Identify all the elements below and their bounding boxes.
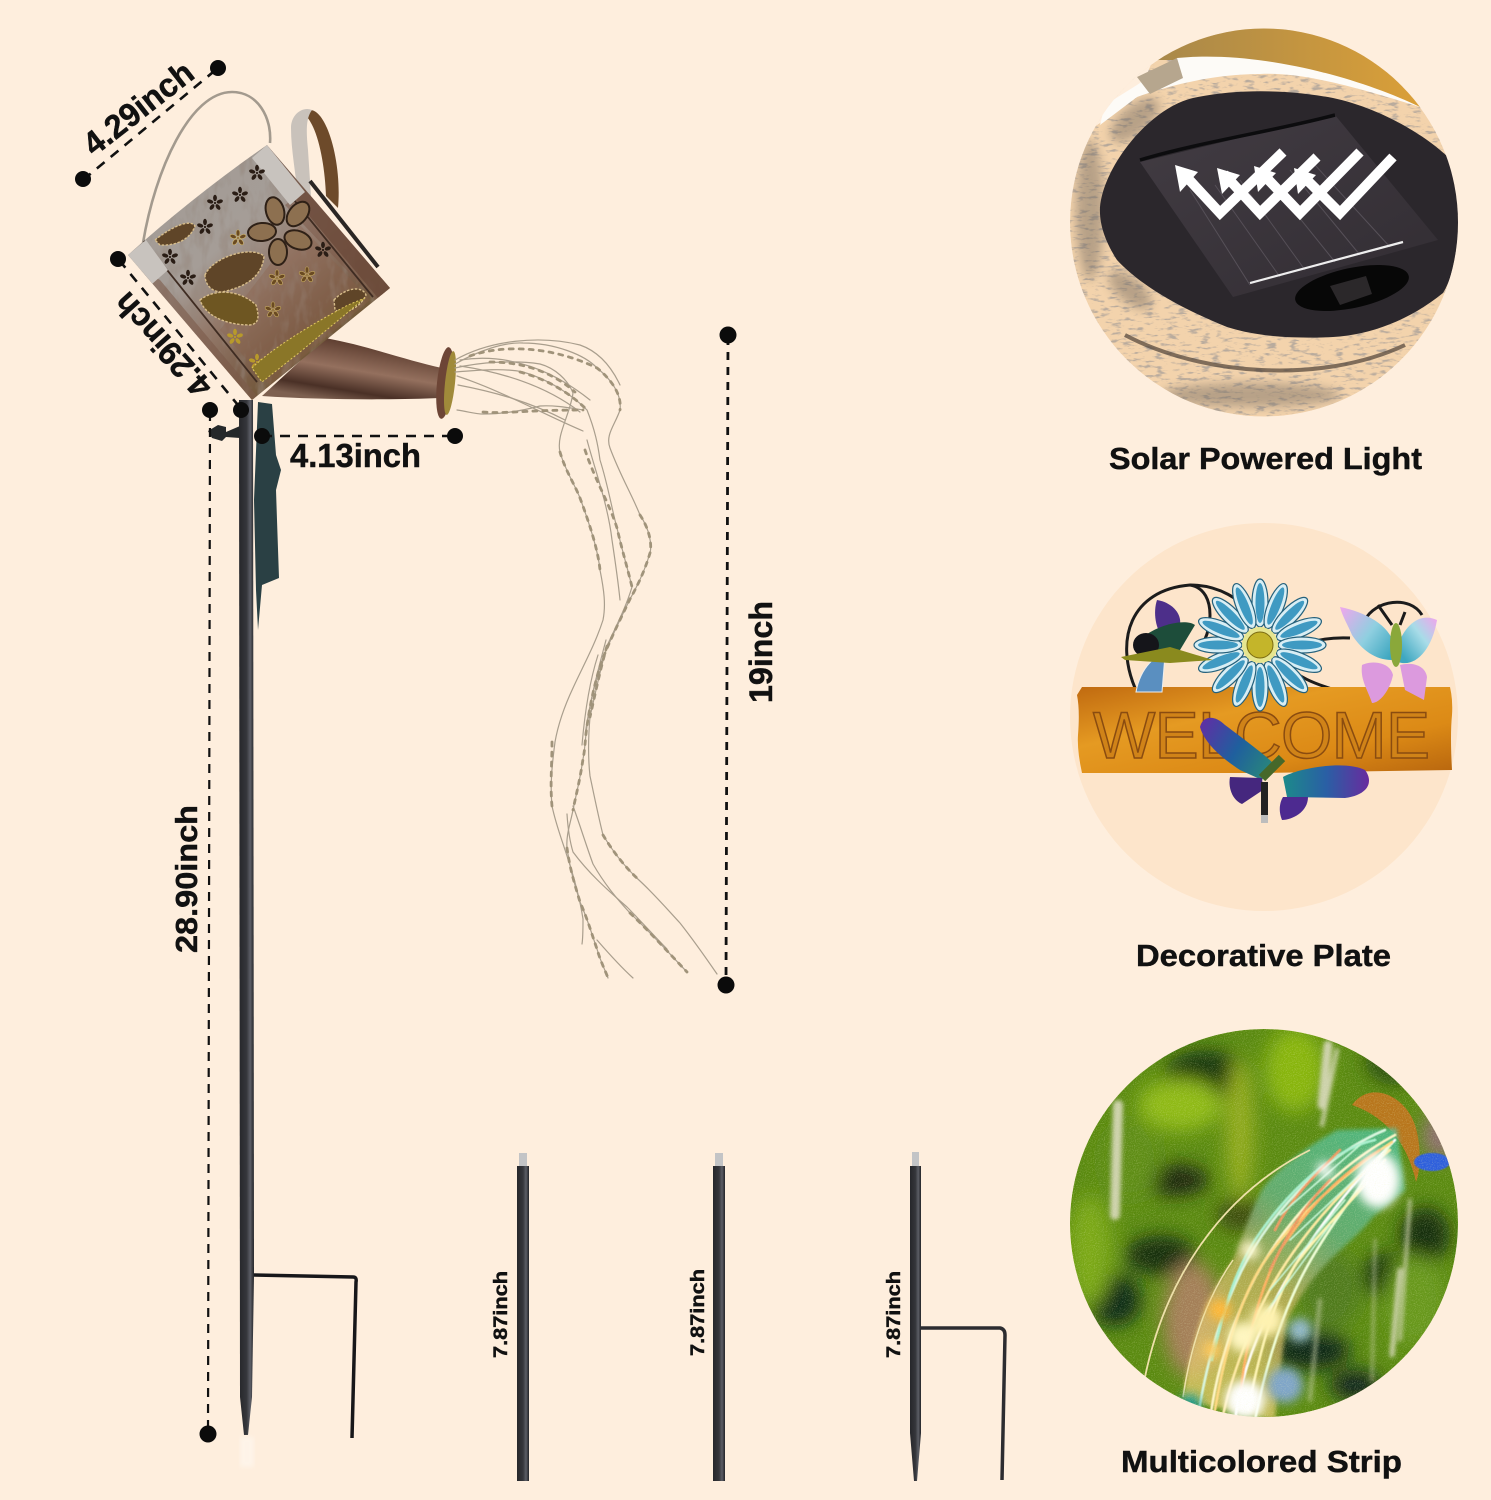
- ground fork: [254, 1275, 356, 1438]
- solar panel edge: [310, 181, 378, 267]
- photo: decorative plate: [1070, 523, 1458, 911]
- dimension: strand length: 19inch: [743, 601, 779, 703]
- dimension: pole height: [169, 402, 218, 1442]
- panel stripes: [1190, 165, 1390, 285]
- dimension: can width: 4.29inch: [76, 53, 201, 163]
- dimension: pole height: 28.90inch: [169, 805, 204, 953]
- spout: [262, 338, 442, 399]
- dimension: can depth: [106, 251, 249, 418]
- can wire handle: [143, 92, 270, 243]
- white arrows: [1175, 152, 1393, 213]
- dimension: strand length: [718, 326, 779, 994]
- decorative plate seen edge-on: [254, 402, 281, 630]
- white gap: [1100, 57, 1420, 125]
- spout nozzle: [433, 346, 458, 420]
- mounting clamp: [208, 425, 240, 441]
- butterfly top right: [1340, 605, 1437, 703]
- dragonfly: [1121, 600, 1213, 692]
- lower rim line: [1125, 335, 1405, 370]
- photo: multicolored strip: [1068, 1028, 1458, 1420]
- pole: [208, 400, 356, 1467]
- extension rod 3 with fork: [884, 1152, 1005, 1481]
- grey handle block: [1137, 58, 1183, 94]
- white contact line: [1250, 242, 1403, 283]
- can small flowers: [162, 165, 331, 286]
- beads: [470, 349, 687, 978]
- watering can: [120, 92, 458, 420]
- dimension: spout reach: 4.13inch: [290, 437, 421, 474]
- plate lettering: WELCOME: [1093, 698, 1430, 772]
- extension rod 2: [688, 1153, 725, 1481]
- caption: solar: Solar Powered Light: [1109, 441, 1422, 476]
- gold handle: [1158, 28, 1420, 108]
- mottled rim: [1070, 30, 1458, 416]
- dark weathered patches: [1076, 90, 1340, 407]
- copper side bands: [285, 190, 395, 300]
- black wire scrolls: [1127, 585, 1422, 690]
- pale water streaks: [1115, 1045, 1410, 1400]
- dimension: spout reach: [254, 428, 463, 474]
- can butterfly cutouts: [155, 223, 366, 325]
- extension rod 1: [491, 1153, 529, 1481]
- gold lace band: [252, 298, 365, 382]
- main stake: [239, 400, 254, 1435]
- fine wires: [455, 340, 717, 978]
- solar panel: [1140, 115, 1438, 297]
- dimension: can depth: 4.29inch: [106, 285, 219, 405]
- background above rim: [1096, 65, 1151, 126]
- blurred garden: [1068, 1028, 1458, 1400]
- dimension: can width: [75, 53, 226, 187]
- extension rod 1: 7.87inch: [491, 1271, 512, 1358]
- butterfly bottom: [1200, 718, 1369, 823]
- light strands: [455, 340, 717, 978]
- light fan: [1183, 1128, 1405, 1420]
- extension rod 3 with fork: 7.87inch: [884, 1271, 905, 1358]
- black lid: [1100, 91, 1459, 338]
- photo: solar panel: [1060, 20, 1470, 430]
- extension rod 2: 7.87inch: [688, 1269, 709, 1356]
- switch slot: [1295, 265, 1409, 311]
- can body: [120, 140, 400, 405]
- welcome plate: [1077, 687, 1452, 773]
- glowing lights: [1179, 1152, 1400, 1420]
- thin outer wires: [1145, 1150, 1310, 1377]
- rear handle: [291, 109, 339, 208]
- nozzle: [1352, 1092, 1420, 1182]
- caption: strip: Multicolored Strip: [1121, 1444, 1402, 1479]
- light strands: [1198, 1130, 1395, 1420]
- caption: plate: Decorative Plate: [1136, 938, 1391, 973]
- can big flower: [247, 195, 314, 265]
- daisy: [1194, 579, 1326, 711]
